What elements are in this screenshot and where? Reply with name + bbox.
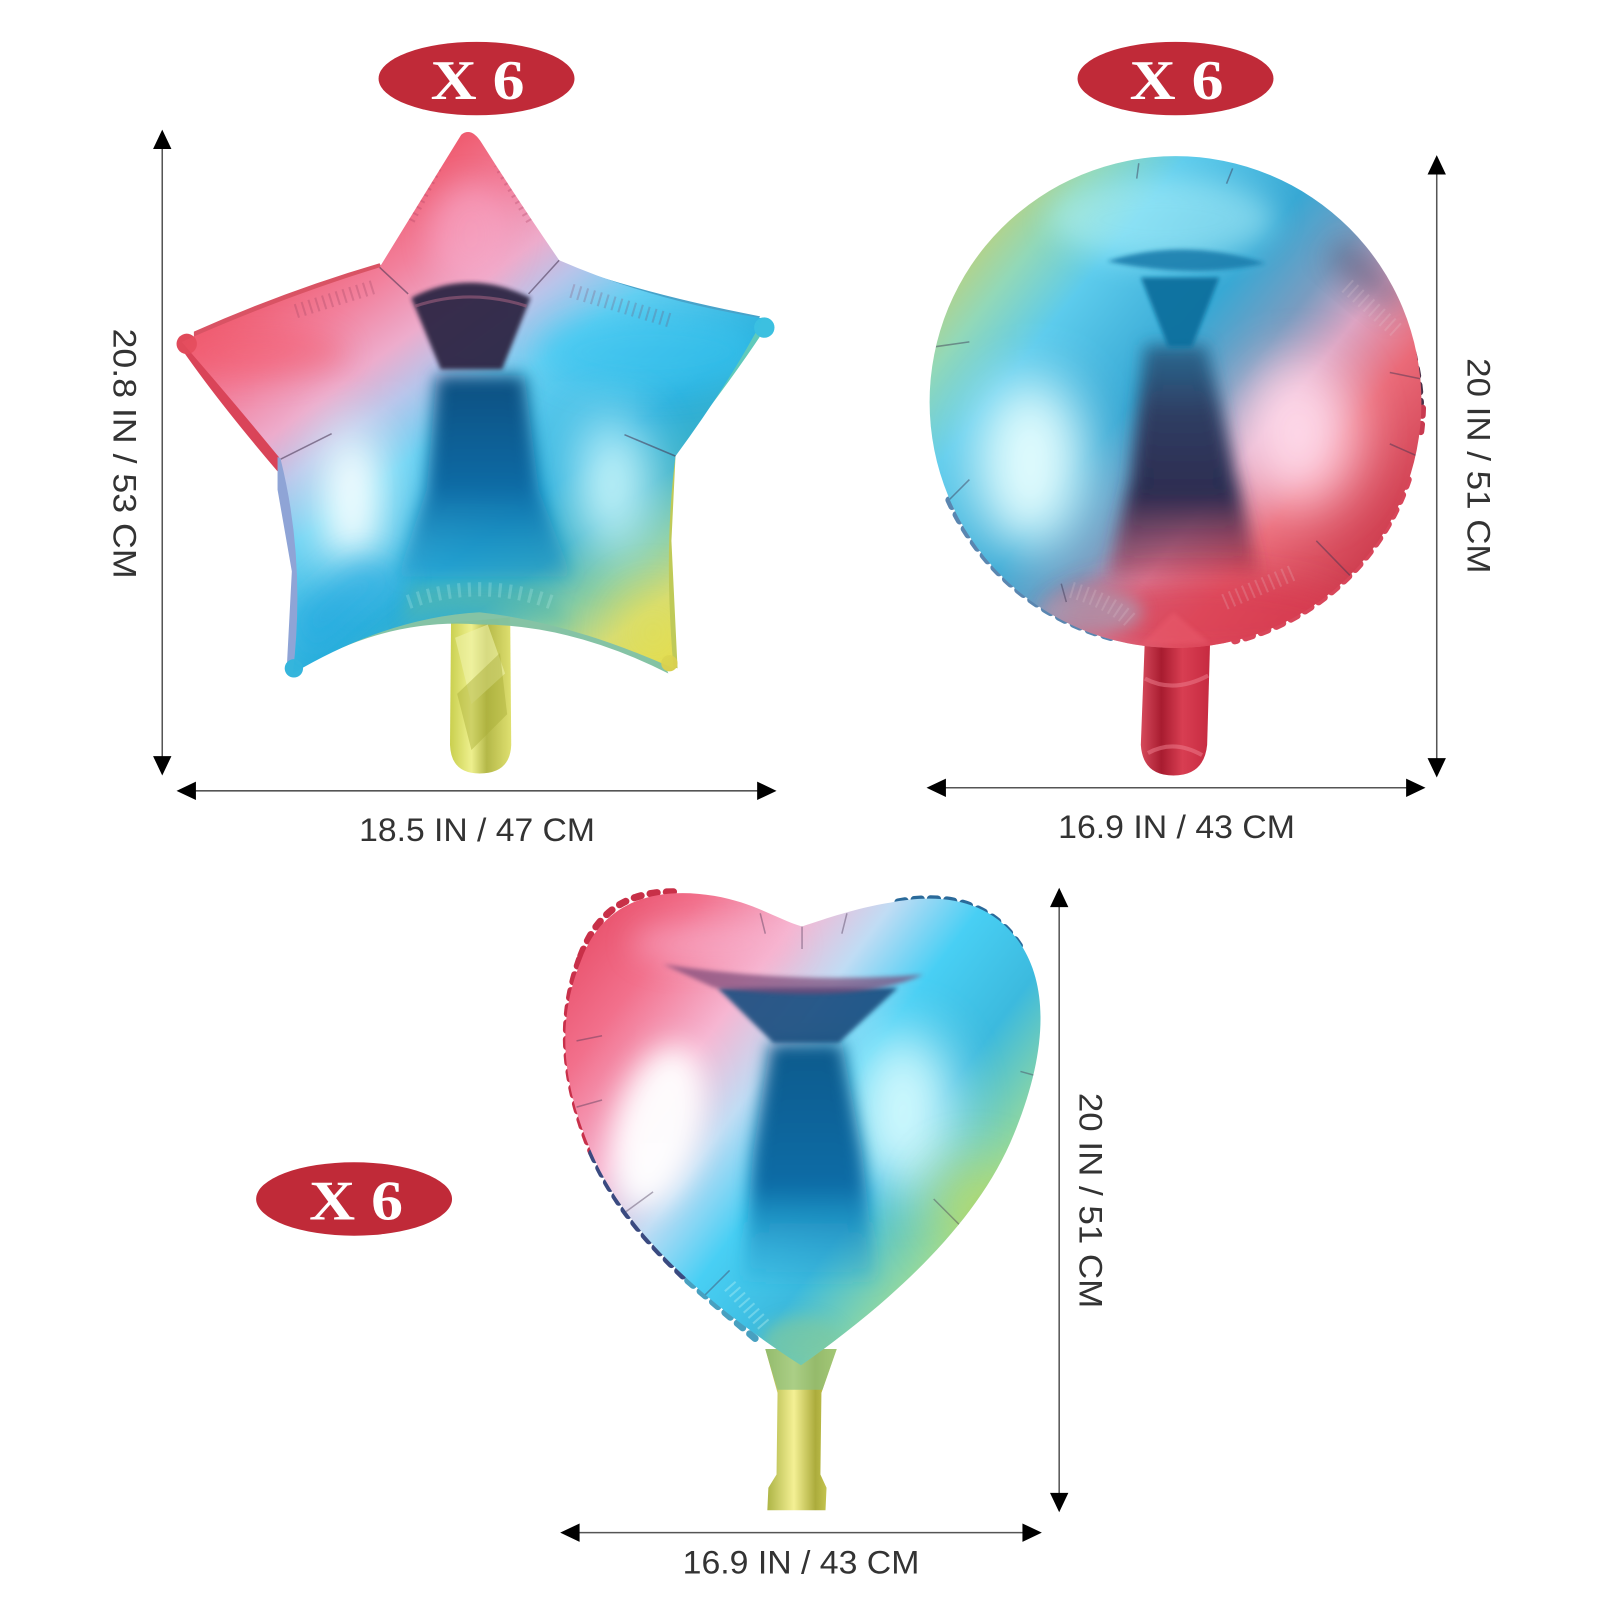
label: heart width: 16.9 IN / 43 CM (683, 1543, 919, 1580)
star balloon neck (450, 617, 511, 773)
round balloon scallop fringe (949, 230, 1422, 641)
round balloon body (930, 156, 1424, 660)
arrow: heart height (1050, 888, 1068, 1512)
arrow: round width (927, 779, 1426, 797)
label: heart height: 20 IN / 51 CM (1073, 1093, 1110, 1308)
badge: X 6 heart (256, 1162, 452, 1236)
label: star width: 18.5 IN / 47 CM (359, 811, 595, 848)
label: round height: 20 IN / 51 CM (1460, 358, 1497, 573)
arrow: heart width (560, 1523, 1042, 1542)
badge: X 6 round: X 6 (1130, 50, 1223, 112)
heart balloon neck (765, 1349, 837, 1510)
heart balloon body (565, 893, 1041, 1366)
arrow: star height (153, 130, 171, 776)
star balloon fringe (184, 263, 763, 673)
badge: X 6 star (379, 42, 574, 115)
arrow: star width (177, 782, 777, 800)
panel: star balloon (106, 42, 777, 848)
round balloon neck (1141, 638, 1210, 776)
badge: X 6 star: X 6 (431, 50, 524, 112)
panel: heart balloon (256, 888, 1110, 1580)
heart balloon scallop fringe (566, 892, 1021, 1343)
arrow: round height (1428, 155, 1446, 778)
label: round width: 16.9 IN / 43 CM (1058, 808, 1295, 845)
label: star height: 20.8 IN / 53 CM (106, 329, 143, 579)
panel: round balloon (927, 42, 1497, 845)
badge: X 6 round (1078, 42, 1273, 115)
badge: X 6 heart: X 6 (309, 1170, 403, 1232)
star balloon body (163, 132, 774, 678)
